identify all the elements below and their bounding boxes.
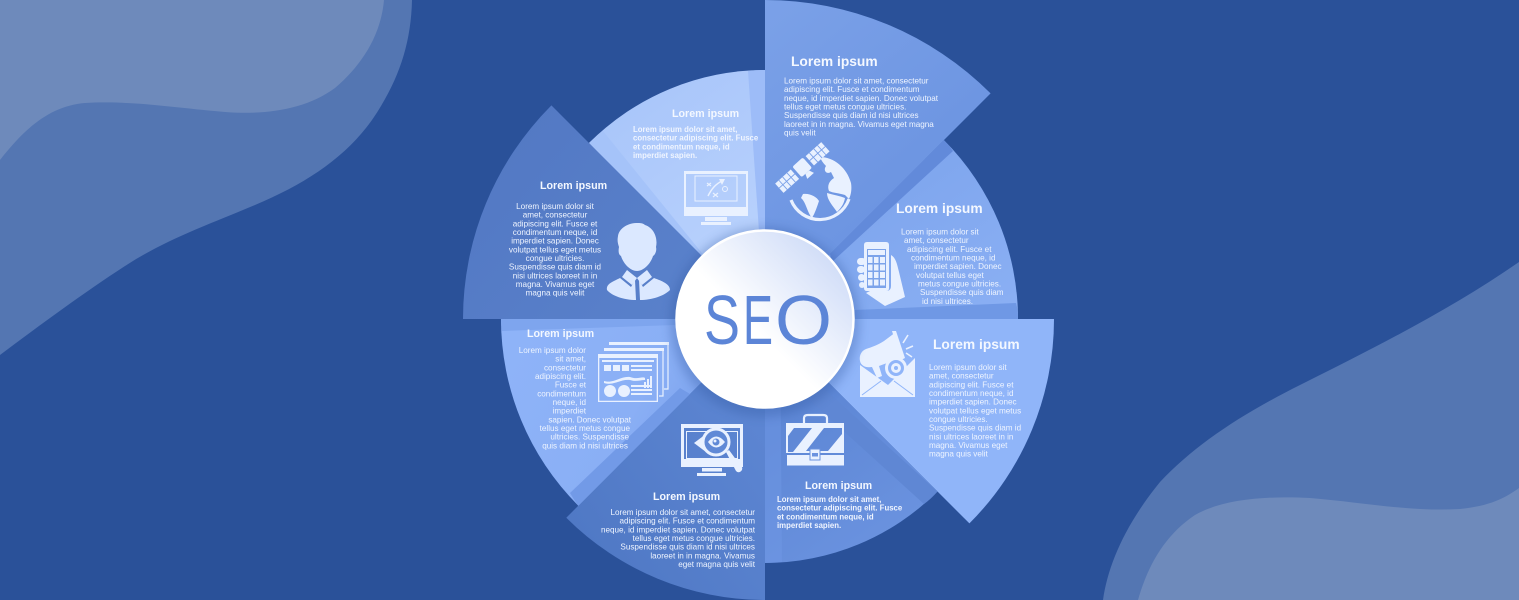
text block: volutpat tellus eget metus bbox=[509, 245, 601, 254]
text block: consectetur bbox=[544, 363, 586, 372]
heading: Lorem ipsum bbox=[653, 491, 720, 503]
text block: condimentum neque, id bbox=[929, 389, 1013, 398]
text block: congue ultricies. bbox=[526, 254, 584, 263]
text block: adipiscing elit. bbox=[535, 372, 586, 381]
text block: Lorem ipsum dolor sit amet, bbox=[633, 125, 737, 134]
text block: Lorem ipsum dolor sit amet, consectetur bbox=[610, 508, 755, 517]
text block: Suspendisse quis diam id bbox=[929, 424, 1021, 433]
text block: volutpat tellus eget metus bbox=[929, 406, 1021, 415]
segment: left upper bbox=[463, 105, 765, 319]
text block: Suspendisse quis diam id bbox=[509, 263, 601, 272]
heading: Lorem ipsum bbox=[896, 201, 983, 216]
text block: tellus eget metus congue bbox=[540, 424, 630, 433]
text block: imperdiet sapien. bbox=[633, 151, 697, 160]
text block: consectetur adipiscing elit. Fusce bbox=[633, 134, 759, 143]
text block: condimentum neque, id bbox=[911, 254, 995, 262]
text block: amet, consectetur bbox=[904, 236, 969, 245]
text block: ultricies. Suspendisse bbox=[550, 433, 629, 442]
text block: sapien. Donec volutpat bbox=[548, 415, 632, 424]
segment: left lower bbox=[501, 319, 765, 506]
text block: tellus eget metus congue ultricies. bbox=[633, 534, 755, 543]
text block: amet, consectetur bbox=[523, 211, 588, 220]
text block: magna quis velit bbox=[526, 289, 585, 298]
text block bbox=[519, 346, 632, 450]
icon: briefcase bbox=[786, 415, 844, 466]
text block: id nisi ultrices. bbox=[922, 297, 973, 306]
text block: laoreet in in magna. Vivamus eget magna bbox=[784, 120, 934, 129]
text block: eget magna quis velit bbox=[678, 560, 756, 569]
icon: satellite and globe bbox=[774, 141, 851, 220]
text block: adipiscing elit. Fusce et condimentum bbox=[784, 85, 920, 94]
text block: Suspendisse quis diam id nisi ultrices bbox=[620, 543, 755, 552]
segment: right lower bbox=[765, 319, 1054, 523]
text block: imperdiet sapien. Donec bbox=[929, 398, 1017, 407]
icon: hand holding phone bbox=[857, 242, 905, 306]
text block bbox=[901, 228, 1004, 306]
text block: quis velit bbox=[784, 128, 816, 138]
text block bbox=[929, 363, 1021, 459]
text block: amet, consectetur bbox=[929, 372, 994, 381]
text block: adipiscing elit. Fusce et condimentum bbox=[620, 517, 755, 526]
text block: et condimentum neque, id bbox=[633, 142, 730, 151]
text block: neque, id bbox=[553, 398, 586, 407]
text block: Lorem ipsum dolor sit bbox=[516, 202, 595, 211]
text block: Lorem ipsum dolor sit amet, consectetur bbox=[784, 76, 929, 86]
heading: Lorem ipsum bbox=[791, 54, 878, 69]
segment: bottom left bbox=[566, 319, 765, 600]
text block: et condimentum neque, id bbox=[777, 512, 874, 521]
text block: magna. Vivamus eget bbox=[516, 280, 595, 289]
text block: volutpat tellus eget bbox=[916, 271, 984, 280]
text block: nisi ultrices laoreet in in bbox=[513, 271, 597, 280]
text block bbox=[784, 76, 939, 138]
text block: quis diam id nisi ultrices bbox=[542, 441, 628, 450]
text block: laoreet in in magna. Vivamus bbox=[650, 551, 755, 560]
text block: imperdiet sapien. bbox=[777, 521, 841, 530]
center shadow bbox=[670, 227, 860, 417]
segment: top-right bbox=[765, 0, 991, 319]
text block: consectetur adipiscing elit. Fusce bbox=[777, 504, 903, 513]
text block: magna. Vivamus eget bbox=[929, 441, 1008, 450]
text block bbox=[601, 508, 756, 569]
text block: neque, id imperdiet sapien. Donec volutpat bbox=[601, 525, 756, 534]
title: SEO: O bbox=[775, 281, 832, 359]
text block: Lorem ipsum dolor sit bbox=[901, 228, 979, 236]
text block: magna quis velit bbox=[929, 450, 988, 459]
text block: Lorem ipsum dolor sit amet, bbox=[777, 495, 881, 504]
text block: Suspendisse quis diam id nisi ultrices bbox=[784, 111, 919, 120]
heading: Lorem ipsum bbox=[672, 108, 739, 120]
text block: adipiscing elit. Fusce et bbox=[929, 380, 1014, 389]
text block: adipiscing elit. Fusce et bbox=[907, 245, 992, 254]
heading: Lorem ipsum bbox=[933, 337, 1020, 352]
text block: adipiscing elit. Fusce et bbox=[513, 219, 598, 228]
heading: Lorem ipsum bbox=[540, 180, 607, 192]
text block: tellus eget metus congue ultricies. bbox=[784, 102, 906, 112]
blob: top-left inner bbox=[0, 0, 384, 160]
heading: Lorem ipsum bbox=[805, 480, 872, 492]
title: SEO: E bbox=[743, 281, 773, 359]
text block: sit amet, bbox=[555, 355, 586, 364]
icon: monitor with eye and magnifier bbox=[681, 424, 743, 476]
text block: Suspendisse quis diam bbox=[920, 288, 1004, 297]
text block: imperdiet sapien. Donec bbox=[914, 262, 1002, 271]
blob: bottom-right inner bbox=[1138, 488, 1519, 600]
title: SEO: S bbox=[704, 281, 740, 359]
text block: Lorem ipsum dolor bbox=[519, 346, 586, 355]
text block: neque, id imperdiet sapien. Donec volutpat bbox=[784, 94, 939, 103]
text block: imperdiet sapien. Donec bbox=[511, 237, 599, 246]
icon: megaphone and envelope bbox=[860, 331, 915, 397]
text block: nisi ultrices laoreet in in bbox=[929, 432, 1013, 441]
blob: bottom-right outer bbox=[1103, 262, 1519, 600]
center circle: SEO bbox=[676, 230, 854, 408]
icon: dashboard windows bbox=[598, 342, 669, 402]
text block: metus congue ultricies. bbox=[918, 280, 1001, 288]
text block: Lorem ipsum dolor sit bbox=[929, 363, 1007, 372]
icon: monitor with strategy bbox=[684, 171, 748, 225]
blob: top-left outer bbox=[0, 0, 412, 355]
text block: Fusce et bbox=[555, 381, 587, 390]
segment: right upper bbox=[765, 140, 1018, 319]
text block: congue ultricies. bbox=[929, 415, 988, 424]
segment: top-left bbox=[589, 70, 765, 319]
text block bbox=[633, 125, 759, 160]
text block: imperdiet bbox=[553, 407, 587, 416]
segment: bottom right bbox=[765, 319, 938, 563]
text block bbox=[509, 202, 601, 298]
icon: businessman bbox=[607, 223, 670, 300]
text block: condimentum bbox=[537, 389, 586, 398]
text block: condimentum neque, id bbox=[513, 228, 597, 237]
heading: Lorem ipsum bbox=[527, 328, 594, 340]
text block bbox=[777, 495, 903, 530]
